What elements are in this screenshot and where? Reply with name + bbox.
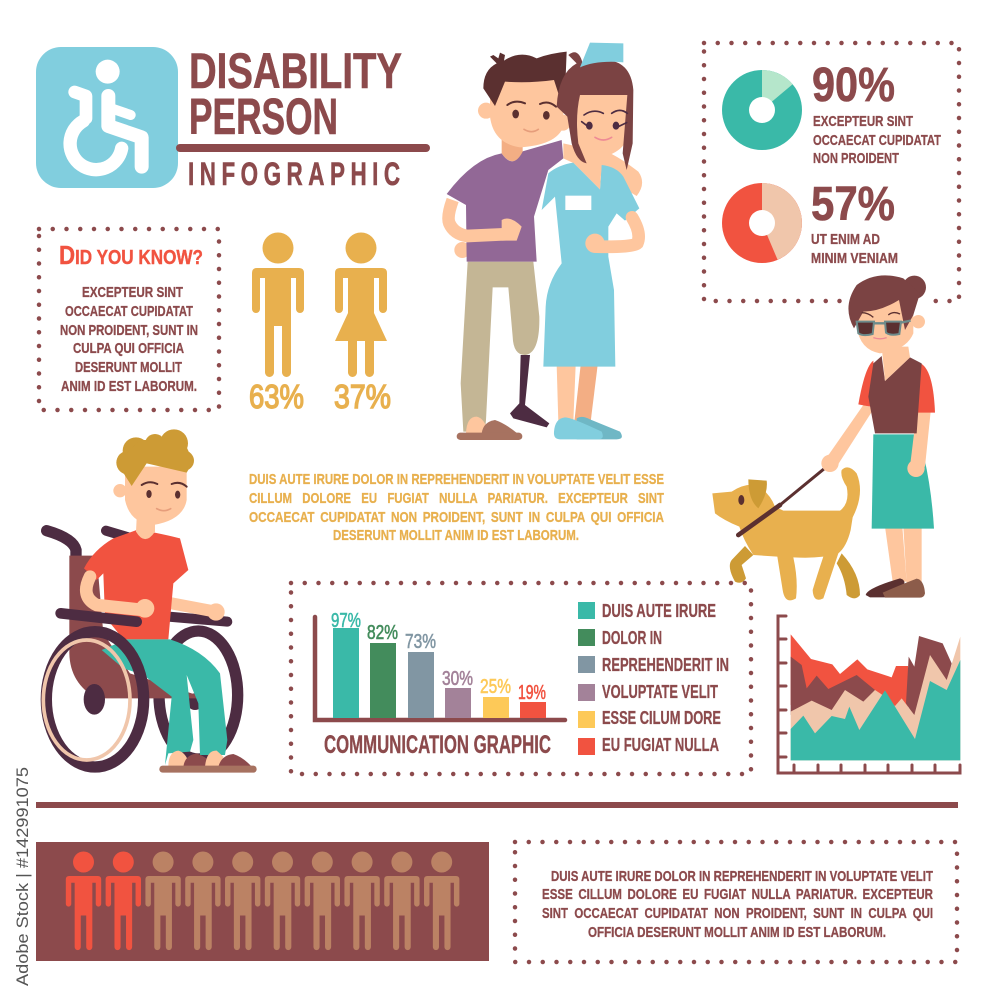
heading: did you know: DID YOU KNOW? <box>59 240 203 270</box>
nurse arm <box>597 217 639 247</box>
feet <box>168 751 190 767</box>
man pants <box>461 262 539 432</box>
bar chart: 97% <box>331 610 361 632</box>
logo: wheelchair icon <box>36 47 178 188</box>
legend: VOLUPTATE VELIT <box>602 682 718 702</box>
panel: pie statistics <box>704 43 959 301</box>
panel: people pictogram <box>36 842 489 961</box>
head <box>113 484 127 497</box>
text block: center paragraph: OCCAECAT CUPIDATAT NON PROIDENT, SUNT IN CULPA QUI OFFICIA <box>249 510 664 526</box>
area chart <box>778 616 960 773</box>
highlighted figures <box>66 852 141 950</box>
neck <box>136 518 155 539</box>
stat: 57 percent: 57% <box>811 178 895 231</box>
text block: did you know body: EXCEPTEUR SINT <box>82 285 183 301</box>
illustration: boy in wheelchair <box>43 429 257 773</box>
text block: 90 percent caption: OCCAECAT CUPIDATAT <box>813 133 941 149</box>
panel: communication graphic <box>291 583 751 774</box>
donut: 57 percent <box>722 183 802 263</box>
far wheel <box>159 631 238 759</box>
text block: center paragraph: DESERUNT MOLLIT ANIM ID EST LABORUM. <box>333 528 579 544</box>
divider bar <box>36 802 958 808</box>
dog <box>730 546 753 583</box>
man arm <box>449 200 510 236</box>
pants <box>102 639 227 765</box>
near wheel <box>46 632 144 767</box>
legend <box>578 601 729 755</box>
bar chart: 73% <box>405 631 436 653</box>
donut: 90 percent <box>722 70 802 150</box>
sleeves and top <box>858 361 875 408</box>
illustration: man with prosthetic leg and nurse <box>447 43 642 440</box>
legs and shoes <box>885 527 907 582</box>
title: INFOGRAPHIC <box>188 156 400 192</box>
text block: center paragraph: DUIS AUTE IRURE DOLOR IN REPREHENDERIT IN VOLUPTATE VELIT ESSE <box>249 472 664 488</box>
stat: 90 percent: 90% <box>812 59 895 112</box>
icon: female figure <box>335 232 387 377</box>
text block: 57 percent caption: UT ENIM AD <box>811 232 880 248</box>
bar chart: 82% <box>367 622 398 644</box>
legend: REPREHENDERIT IN <box>602 655 729 675</box>
text block: did you know body: DESERUNT MOLLIT <box>75 360 182 376</box>
text block: 57 percent caption <box>811 232 898 267</box>
skirt <box>872 434 934 529</box>
man shirt <box>447 140 563 262</box>
title: DISABILITY <box>189 43 402 99</box>
text block: 90 percent caption: NON PROIDENT <box>813 151 899 167</box>
head <box>903 276 926 299</box>
text block: center paragraph <box>249 472 664 544</box>
muted figures <box>145 852 459 950</box>
legend: ESSE CILUM DORE <box>602 708 721 728</box>
text block: did you know body: ANIM ID EST LABORUM. <box>61 379 197 395</box>
text block: bottom paragraph <box>542 869 933 941</box>
far armrest and arm <box>168 617 227 622</box>
panel: bottom paragraph <box>515 842 957 962</box>
title <box>176 43 430 192</box>
man head <box>478 103 494 119</box>
text block: did you know body: CULPA QUI OFFICIA <box>73 341 184 357</box>
seat <box>69 556 202 698</box>
bar chart <box>315 610 565 720</box>
icon: male figure <box>252 232 304 377</box>
legend: EU FUGIAT NULLA <box>602 735 719 755</box>
near arm <box>86 577 143 610</box>
text block: center paragraph: CILLUM DOLORE EU FUGIAT NULLA PARIATUR. EXCEPTEUR SINT <box>249 491 664 507</box>
bar chart: 19% <box>518 682 546 704</box>
gender statistics <box>249 232 391 415</box>
arms <box>825 405 874 467</box>
near armrest <box>61 613 137 622</box>
bar chart: 25% <box>480 676 511 698</box>
nurse dress <box>542 163 639 367</box>
nurse head <box>555 115 571 131</box>
title: PERSON <box>189 88 338 145</box>
chart title: COMMUNICATION GRAPHIC <box>324 731 551 759</box>
text block: 57 percent caption: MINIM VENIAM <box>811 251 898 267</box>
side credit: Adobe Stock | #142991075 <box>13 767 32 986</box>
text block: bottom paragraph: OFFICIA DESERUNT MOLLIT ANIM ID EST LABORUM. <box>588 925 886 941</box>
panel: did you know <box>39 229 219 410</box>
slipper <box>466 417 488 433</box>
text block: did you know body <box>60 285 198 395</box>
legend: DOLOR IN <box>602 628 662 648</box>
prosthetic <box>510 355 549 427</box>
legend: DUIS AUTE IRURE <box>602 601 716 621</box>
text block: did you know body: OCCAECAT CUPIDATAT <box>65 304 193 320</box>
text block: 90 percent caption <box>813 114 941 167</box>
text block: did you know body: NON PROIDENT, SUNT IN <box>60 323 198 339</box>
text block: 90 percent caption: EXCEPTEUR SINT <box>813 114 913 130</box>
shirt <box>84 530 188 639</box>
illustration: blind woman with guide dog <box>712 275 935 600</box>
male percent: 63% <box>249 378 304 415</box>
bar chart: 30% <box>442 668 473 690</box>
female percent: 37% <box>334 378 391 415</box>
nurse legs and shoes <box>574 365 598 422</box>
